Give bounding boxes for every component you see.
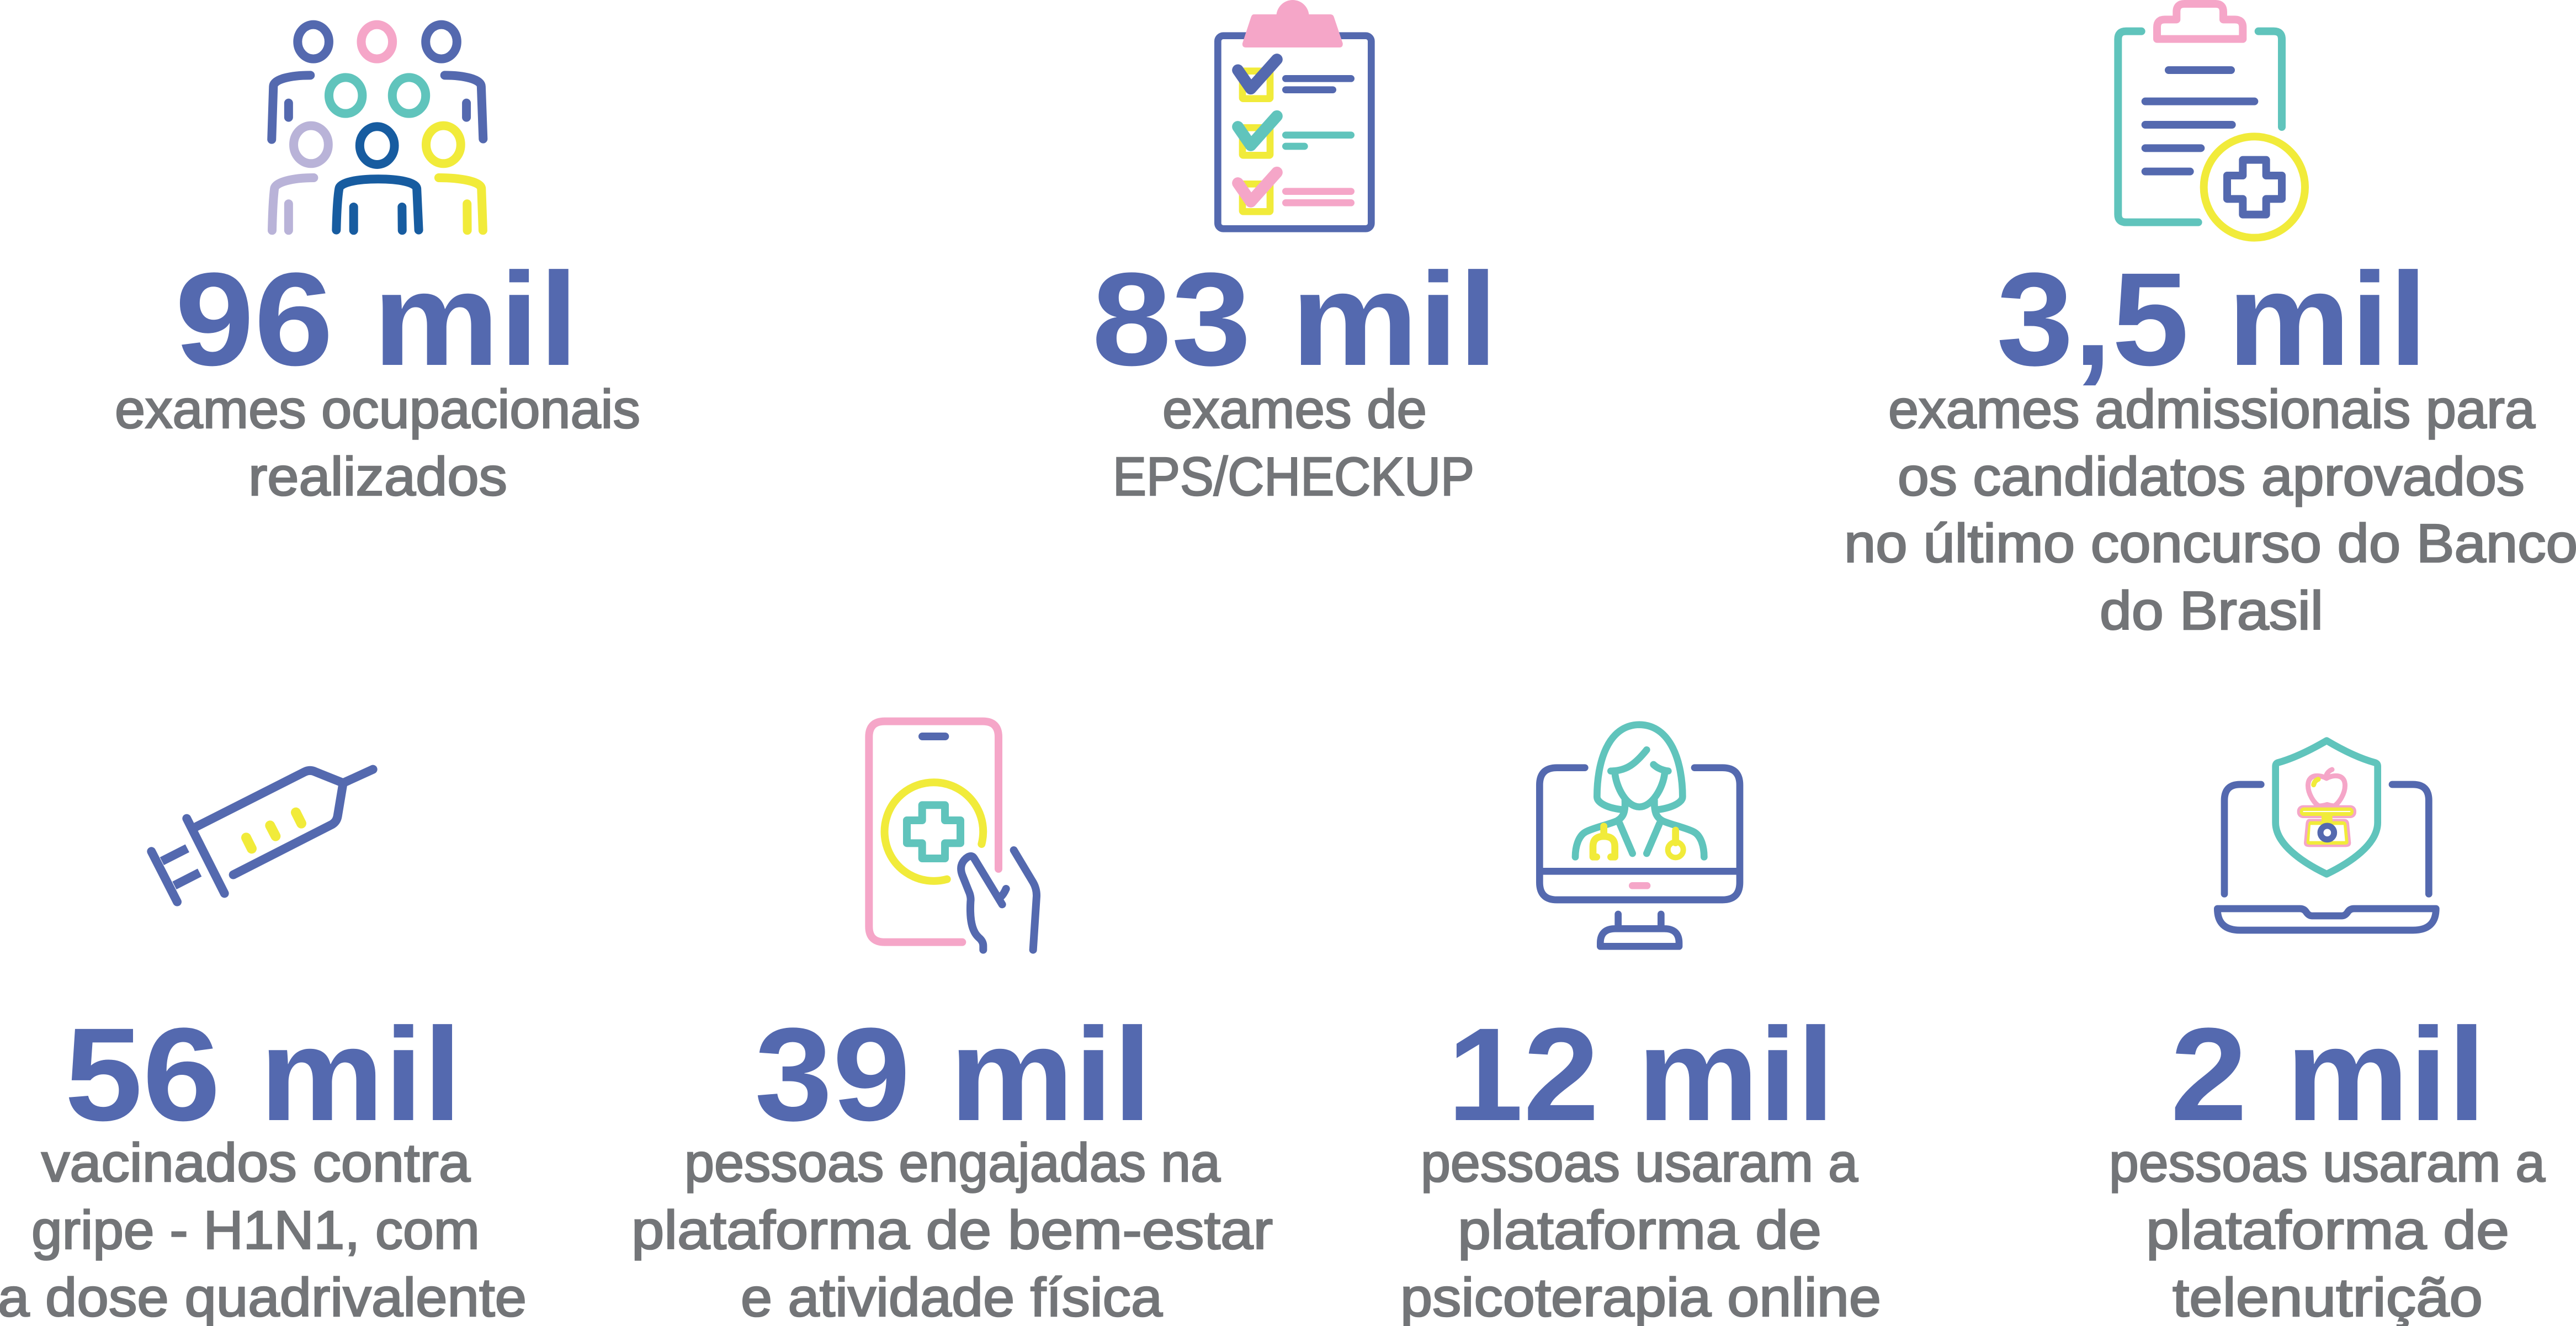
label: pessoas usaram a plataforma de psicoterapia online: psicoterapia online <box>1400 1267 1881 1326</box>
icon: clipboard checklist <box>1218 0 1371 229</box>
number: 56 mil: 56 mil <box>65 1000 462 1148</box>
label: exames de EPS/CHECKUP: exames de <box>1162 379 1427 439</box>
label: exames admissionais para os candidatos aprovados <box>1844 379 2576 641</box>
number: 2 mil: 2 mil <box>2170 1000 2486 1148</box>
label: pessoas usaram a plataforma de psicoterapia online: plataforma de <box>1458 1200 1821 1260</box>
stat: 12 mil psicoterapia <box>1400 725 1881 1326</box>
label: pessoas engajadas na plataforma: e atividade física <box>741 1267 1163 1326</box>
stat: 39 mil pessoas engajadas <box>631 722 1273 1326</box>
label: vacinados contra gripe - H1N1: vacinados contra <box>41 1132 471 1193</box>
stat: 56 mil vacinados <box>0 770 527 1326</box>
icon: syringe <box>151 770 373 902</box>
icon: phone with health cross and hand <box>869 722 1037 950</box>
icon: group of people <box>272 25 483 230</box>
label: exames admissionais para os candidatos aprovados: do Brasil <box>2100 580 2323 641</box>
label: exames ocupacionais realizados <box>115 379 640 507</box>
label: pessoas usaram a plataforma de telenutrição: telenutrição <box>2173 1267 2483 1326</box>
number: 83 mil: 83 mil <box>1092 245 1498 393</box>
label: vacinados contra gripe - H1N1: gripe - H1N1, com <box>31 1200 480 1260</box>
number: 39 mil: 39 mil <box>755 1000 1152 1148</box>
label: pessoas engajadas na plataforma: pessoas engajadas na <box>684 1132 1220 1193</box>
icon: monitor with doctor <box>1539 725 1740 946</box>
stat: 83 mil exames de EPS/CHECKUP <box>1092 0 1498 507</box>
number: 3,5 mil: 3,5 mil <box>1996 245 2428 393</box>
label: exames de EPS/CHECKUP <box>1113 379 1474 507</box>
label: pessoas usaram a plataforma de psicoterapia online: pessoas usaram a <box>1421 1132 1858 1193</box>
label: vacinados contra gripe - H1N1 <box>0 1132 527 1326</box>
label: exames admissionais para os candidatos aprovados: no último concurso do Banco <box>1844 513 2576 574</box>
label: exames ocupacionais realizados: exames ocupacionais <box>115 379 640 439</box>
label: pessoas engajadas na plataforma <box>631 1132 1273 1326</box>
number: 96 mil: 96 mil <box>175 245 578 393</box>
label: pessoas usaram a plataforma de telenutrição <box>2109 1132 2545 1326</box>
label: exames de EPS/CHECKUP: EPS/CHECKUP <box>1113 446 1474 507</box>
stat: 96 mil exames ocupacionais <box>115 25 640 507</box>
label: pessoas usaram a plataforma de telenutrição: pessoas usaram a <box>2109 1132 2545 1193</box>
icon: laptop with shield and food scale <box>2217 741 2436 930</box>
label: exames admissionais para os candidatos aprovados: exames admissionais para <box>1888 379 2535 439</box>
label: exames ocupacionais realizados: realizados <box>248 446 507 507</box>
stat: 3,5 mil exames admissionais <box>1844 4 2576 641</box>
label: pessoas engajadas na plataforma: plataforma de bem-estar <box>631 1200 1273 1260</box>
label: exames admissionais para os candidatos aprovados: os candidatos aprovados <box>1898 446 2525 507</box>
label: pessoas usaram a plataforma de psicoterapia online <box>1400 1132 1881 1326</box>
label: pessoas usaram a plataforma de telenutrição: plataforma de <box>2146 1200 2509 1260</box>
icon: medical clipboard with cross <box>2118 4 2305 238</box>
number: 12 mil: 12 mil <box>1447 1000 1835 1148</box>
stat: 2 mil telenutrição <box>2109 741 2545 1326</box>
